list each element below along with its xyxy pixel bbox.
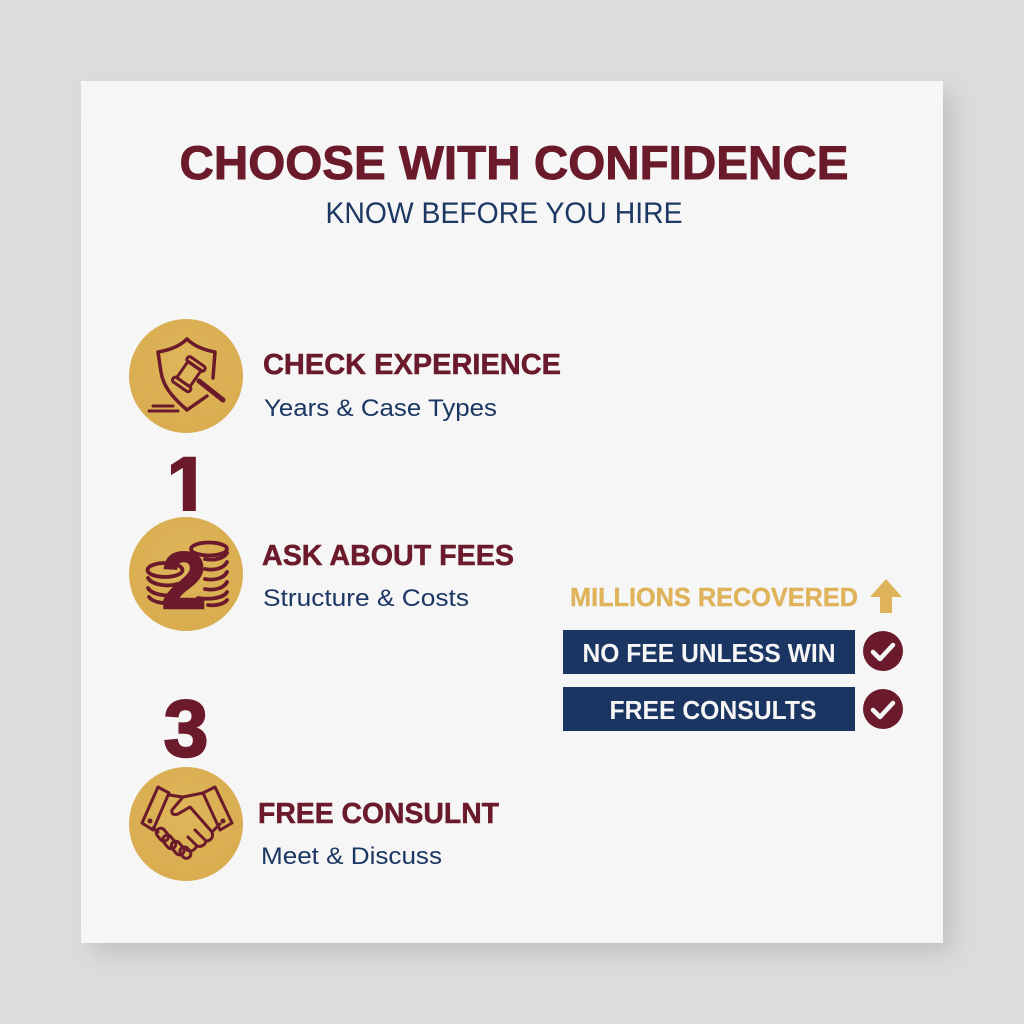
badge: free consults — [563, 687, 855, 731]
icon: check 2 — [863, 689, 903, 729]
icon: up arrow — [870, 579, 902, 613]
step 1: check experience — [129, 319, 561, 433]
heading: check experience: CHECK EXPERIENCE — [263, 349, 561, 381]
step 2: ask about fees — [129, 517, 514, 631]
icon: shield and gavel — [129, 319, 243, 433]
badge: free consults: FREE CONSULTS — [610, 695, 816, 725]
number 1: 1 — [161, 437, 213, 543]
number 3: 3 — [164, 684, 208, 773]
title: CHOOSE WITH CONFIDENCE — [180, 136, 848, 189]
panel: card — [81, 81, 943, 943]
icon: check 1 — [863, 631, 903, 671]
text: years and case types: Years & Case Types — [264, 395, 497, 422]
badge: no fee unless win — [563, 630, 855, 674]
icon: handshake — [129, 767, 243, 881]
step 3: free consult — [129, 767, 499, 881]
icon: coins with number 2: 2 — [162, 536, 206, 625]
text: meet and discuss: Meet & Discuss — [261, 843, 442, 870]
badge: no fee unless win: NO FEE UNLESS WIN — [582, 638, 836, 668]
icon: coins with number 2 — [129, 517, 243, 631]
callout: millions recovered: MILLIONS RECOVERED — [570, 582, 858, 612]
heading: free consult: FREE CONSULNT — [258, 798, 499, 830]
heading: ask about fees: ASK ABOUT FEES — [262, 540, 514, 572]
subtitle: KNOW BEFORE YOU HIRE — [326, 197, 682, 230]
text: structure and costs: Structure & Costs — [263, 585, 469, 612]
